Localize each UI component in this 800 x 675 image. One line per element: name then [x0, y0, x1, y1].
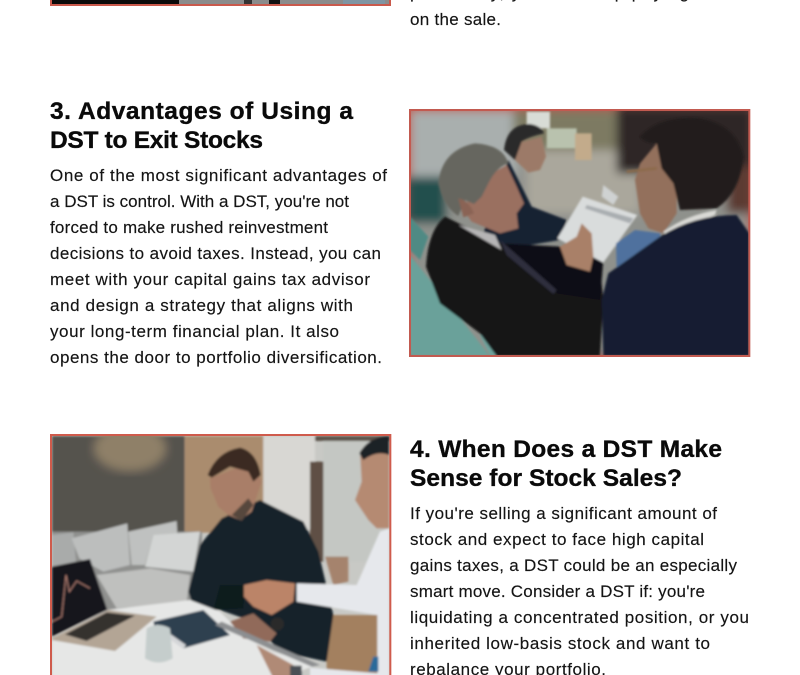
- text block: section 3: and design a strategy that aligns with: [50, 296, 353, 315]
- sofa: [52, 532, 202, 612]
- text block: section 3: opens the door to portfolio diversification.: [50, 348, 382, 367]
- hand: [560, 223, 593, 272]
- table: [52, 600, 317, 675]
- left man face: [463, 165, 524, 233]
- heading: section 4: [410, 436, 722, 492]
- heading: section 4: Sense for Stock Sales?: [410, 465, 682, 492]
- text block: section 3: One of the most significant advantages of: [50, 166, 387, 185]
- text block: section 4: inherited low-basis stock and want to: [410, 634, 710, 653]
- right man: [635, 143, 677, 233]
- heading: section 3: [50, 98, 353, 154]
- text: end of previous section: on the sale.: [410, 10, 501, 29]
- wall: [52, 436, 185, 536]
- photo: handshake at a table with laptop: [50, 425, 391, 675]
- text block: section 3: decisions to avoid taxes. Instead, you can: [50, 244, 381, 263]
- right side: [327, 615, 383, 675]
- paper: [557, 197, 637, 263]
- right man: [354, 452, 390, 530]
- text block: section 3: [50, 166, 387, 367]
- chair teal: [410, 217, 428, 260]
- heading: section 4: 4. When Does a DST Make: [410, 436, 722, 463]
- text block: section 4: liquidating a concentrated position, or you: [410, 608, 749, 627]
- text block: section 3: a DST is control. With a DST, you're not: [50, 192, 349, 211]
- photo: advisors reviewing a document: [407, 107, 753, 357]
- man in black shirt: [188, 500, 333, 662]
- text block: section 4: If you're selling a significant amount of: [410, 504, 717, 523]
- text block: section 4: gains taxes, a DST could be an especially: [410, 556, 738, 575]
- heading: section 3: 3. Advantages of Using a: [50, 98, 353, 125]
- glass: [145, 625, 173, 662]
- background man: [515, 137, 546, 173]
- left man suit: [426, 217, 603, 356]
- tablet: [215, 622, 320, 667]
- text block: section 3: forced to make rushed reinvestment: [50, 218, 328, 237]
- clasped hands and wrist: [244, 580, 295, 615]
- photo: previous section image, cropped: [50, 0, 391, 6]
- face: [210, 468, 261, 521]
- text block: section 4: [410, 504, 749, 675]
- laptop: [52, 559, 107, 637]
- text block: section 3: meet with your capital gains tax advisor: [50, 270, 370, 289]
- text block: section 4: smart move. Consider a DST if: you're: [410, 582, 705, 601]
- text: end of previous section: [410, 0, 722, 29]
- notebook: [153, 610, 230, 648]
- text block: section 4: stock and expect to face high capital: [410, 530, 704, 549]
- heading: section 3: DST to Exit Stocks: [50, 127, 263, 154]
- text block: section 3: your long-term financial plan. It also: [50, 322, 339, 341]
